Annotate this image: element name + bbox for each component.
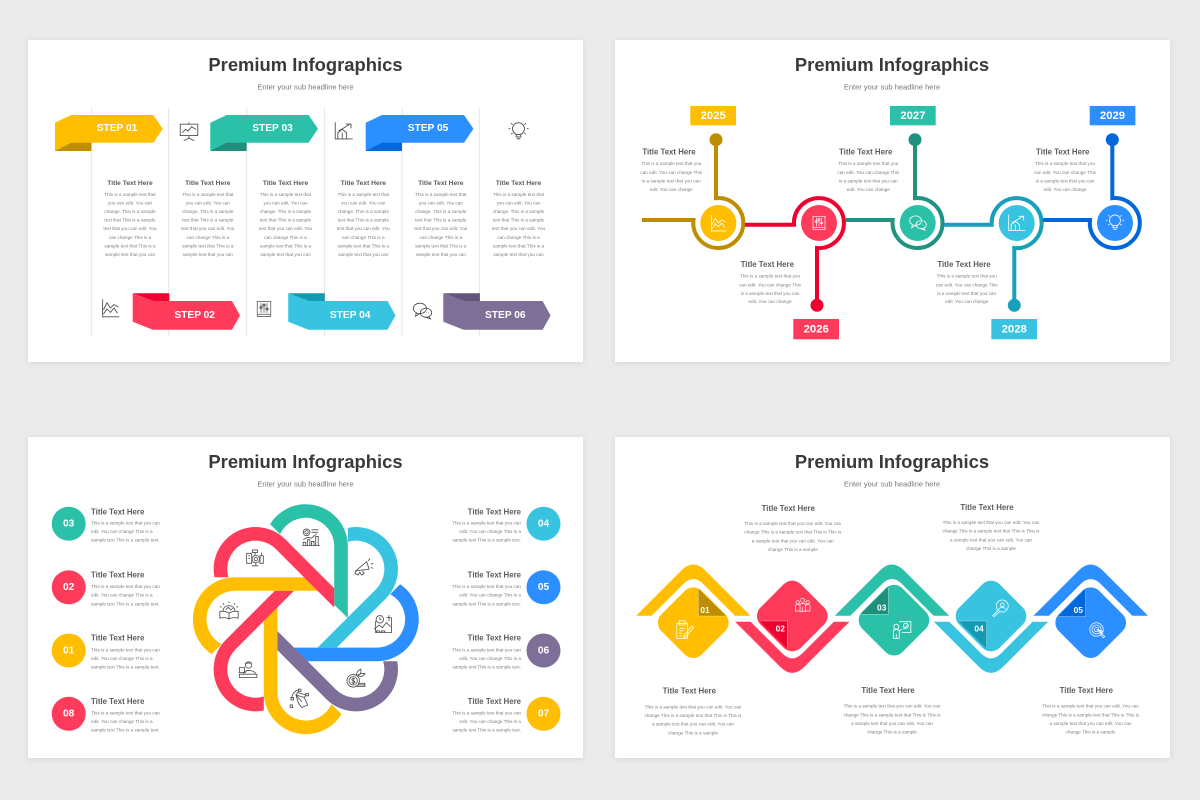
text column 6: you can edit. You can (496, 201, 541, 206)
text column 3: Title Text Here (263, 180, 309, 187)
text column 1: can change This is a (109, 235, 152, 240)
icon: light bulb (508, 123, 529, 139)
text block 2029: edit. You can change (1043, 187, 1087, 192)
list item 08: sample text This is a sample text. (91, 728, 160, 733)
text column 5: change. This is a sample (415, 209, 467, 214)
icon: megaphone (355, 558, 373, 575)
text column 1: Title Text Here (107, 180, 153, 187)
timeline node 2028: 2028 (1002, 323, 1027, 335)
icon: money plant (347, 669, 365, 687)
text block bottom center: a sample text that you can edit. You can (851, 721, 933, 726)
text block bottom left (645, 686, 742, 735)
timeline node 2027: 2027 (900, 110, 925, 122)
text column 6: text that This is a sample (493, 218, 545, 222)
list item 05: Title Text Here (468, 570, 522, 579)
diamond 02: 02 (776, 623, 785, 633)
text block 2027: can edit. You can change This (837, 170, 900, 175)
text column 6: sample text that This is a (493, 243, 545, 248)
list item 05: sample text This is a sample text. (452, 601, 521, 606)
icon: team network (247, 550, 263, 566)
diamond 01: 01 (700, 605, 710, 615)
diamond 04 (934, 576, 1048, 673)
list item 08: Title Text Here (91, 697, 145, 706)
text block 2027: This is a sample text that you (838, 161, 899, 166)
text block 2026: can edit. You can change This (739, 282, 802, 287)
text block bottom center: change This is a sample text that This is This is (844, 712, 941, 717)
text block 2028: edit. You can change (945, 299, 989, 304)
text block bottom center: change This is a sample (867, 730, 917, 735)
list item 08: edit. You can change This is a (91, 719, 153, 724)
text block top right: a sample text that you can edit. You can (950, 537, 1032, 542)
list item 07: 07 (538, 709, 549, 720)
icon: sliders (257, 302, 271, 316)
text column 1: text that you can edit. You (103, 226, 157, 231)
loop: yellow left (193, 577, 318, 654)
text block 2027: edit. You can change (847, 187, 890, 192)
text block bottom center: This is a sample text that you can edit. You can (844, 704, 941, 709)
text column 3: change. This is a sample (260, 209, 312, 214)
text block 2029: is a sample text that you can (1036, 178, 1095, 184)
text column 5 (414, 180, 468, 257)
text block 2025: can edit. You can change This (640, 170, 703, 175)
text column 4: sample text that you can (338, 252, 389, 257)
text column 2: Title Text Here (185, 180, 231, 187)
list item 08: This is a sample text that you can (91, 710, 160, 715)
text block bottom right: This is a sample text that you can edit. You can (1042, 704, 1139, 709)
text block top left: This is a sample text that you can edit. You can (744, 521, 842, 526)
text column 6: Title Text Here (496, 180, 542, 187)
text column 6: can change This is a (497, 235, 540, 240)
subheading: Enter your sub headline here (257, 82, 354, 92)
icon: pen tool (290, 689, 308, 707)
icon: open book (220, 602, 238, 619)
text block top left (744, 504, 842, 552)
text block 2026: This is a sample text that you (740, 274, 800, 279)
panel: diamond process (615, 437, 1170, 758)
list item 04: Title Text Here (468, 507, 522, 516)
timeline node 2025 (642, 106, 743, 248)
text block bottom left: This is a sample text that you can edit. You can (645, 704, 742, 709)
text block 2026: edit. You can change (748, 299, 792, 304)
text block 2029: This is a sample text that you (1035, 161, 1095, 166)
text block bottom right: change This is a sample text that This is This is (1042, 712, 1140, 717)
list item 07: Title Text Here (468, 697, 522, 706)
text column 6: text that you can edit. You (492, 226, 545, 231)
ribbon: step 01 (55, 115, 163, 151)
ribbon: step 04 (288, 293, 396, 330)
text block 2026 (739, 260, 802, 304)
loop: red lower (196, 581, 339, 724)
text block bottom center: Title Text Here (861, 686, 915, 695)
list item 07 (452, 697, 560, 733)
text column 2: change. This is a sample (182, 209, 234, 214)
text block 2025: is a sample text that you can (642, 178, 701, 184)
list item 06 (452, 634, 560, 670)
loop: yellow bottom (264, 607, 342, 734)
text column 4: sample text that This is a (338, 243, 389, 248)
ribbon: step 01: STEP 01 (97, 123, 138, 134)
text column 6: sample text that you can (493, 252, 544, 257)
ribbon: step 05 (366, 115, 473, 151)
text block bottom right: a sample text that you can edit. You can (1049, 721, 1132, 726)
text column 5: This is a sample text that (415, 192, 467, 197)
text column 5: you can edit. You can (419, 201, 463, 206)
list item 05: edit. You can change This is a (459, 593, 521, 598)
text block 2028: This is a sample text that you (937, 274, 997, 279)
icon: analytics (302, 529, 320, 546)
text block top right: change This is a sample (966, 546, 1016, 551)
text column 5: text that you can edit. You (414, 226, 468, 231)
text column 6: change. This is a sample (493, 209, 545, 214)
text column 5: text that This is a sample (415, 218, 467, 222)
text column 1: sample text that you can (105, 252, 156, 257)
list item 04: This is a sample text that you can (452, 520, 521, 525)
ribbon: step 03: STEP 03 (252, 123, 293, 134)
text column 1: text that This is a sample (104, 218, 156, 222)
text column 1 (103, 180, 157, 257)
text block top right: change This is a sample text that This is This is (943, 529, 1040, 534)
text block bottom left: Title Text Here (663, 686, 717, 695)
text column 3: text that This is a sample (260, 218, 312, 222)
text block 2025: This is a sample text that you (641, 161, 702, 166)
list item 02 (52, 570, 160, 606)
text block top left: change This is a sample text that This is This is (744, 530, 842, 535)
timeline node 2029: 2029 (1100, 110, 1125, 122)
text block bottom right: Title Text Here (1060, 686, 1114, 695)
list item 07: This is a sample text that you can (452, 710, 521, 715)
list item 07: sample text This is a sample text. (452, 728, 521, 733)
list item 04: edit. You can change This is a (459, 529, 521, 534)
text column 2: can change This is a (187, 235, 229, 240)
list item 01 (52, 634, 160, 670)
text block top left: a sample text that you can edit. You can (752, 538, 834, 543)
subheading: Enter your sub headline here (844, 82, 940, 92)
list item 01: edit. You can change This is a (91, 656, 153, 661)
ribbon: step 05: STEP 05 (408, 123, 449, 134)
text block 2026: Title Text Here (741, 260, 795, 269)
text column 3: sample text that you can (260, 252, 311, 257)
text column 4 (337, 180, 390, 257)
loop: red upper (201, 510, 344, 652)
ribbon: step 04: STEP 04 (330, 310, 371, 321)
text block 2028: can edit. You can change This (936, 282, 998, 287)
text column 4: text that This is a sample (338, 218, 389, 222)
text column 3 (259, 180, 312, 257)
text block bottom right (1042, 686, 1140, 735)
diamond 03 (835, 564, 949, 661)
text block 2025 (640, 148, 703, 192)
list item 02: This is a sample text that you can (91, 584, 160, 589)
text block top left: change This is a sample (768, 547, 818, 552)
text column 1: sample text that This is a (104, 243, 156, 248)
list item 03: Title Text Here (91, 507, 145, 516)
ribbon: step 02: STEP 02 (174, 310, 215, 321)
diamond 04: 04 (974, 623, 984, 633)
text block 2028: is a sample text that you can (937, 291, 997, 296)
text block bottom left: change This is a sample text that This is This is (645, 713, 742, 718)
text column 5: can change This is a (420, 235, 462, 240)
ribbon: step 06 (443, 293, 551, 330)
text column 6: This is a sample text that (493, 192, 545, 197)
list item 05 (452, 570, 560, 606)
list item 03: sample text This is a sample text. (91, 538, 160, 543)
subheading: Enter your sub headline here (844, 480, 940, 488)
text column 4: can change This is a (342, 235, 385, 240)
list item 05: 05 (538, 582, 549, 593)
text column 3: text that you can edit. You (259, 226, 312, 231)
diamond 03: 03 (877, 603, 887, 613)
text column 2: text that This is a sample (182, 218, 234, 222)
list item 07: edit. You can change This is a (459, 719, 521, 724)
list item 03: edit. You can change This is a (91, 529, 153, 534)
text block top right: This is a sample text that you can edit. You can (943, 520, 1040, 525)
list item 01: Title Text Here (91, 634, 145, 643)
list item 06: 06 (538, 645, 549, 656)
ribbon: step 06: STEP 06 (485, 310, 526, 321)
text block top right (943, 503, 1040, 551)
list item 01: 01 (63, 645, 75, 656)
text column 1: you can edit. You can (108, 201, 152, 206)
flower loops (193, 504, 419, 734)
diamond 05 (1034, 564, 1148, 663)
text column 4: This is a sample text that (338, 192, 390, 197)
text block 2025: edit. You can change (650, 187, 693, 192)
timeline node 2025: 2025 (701, 110, 726, 122)
icon: person at desk (239, 662, 257, 678)
timeline node 2029 (1043, 106, 1140, 248)
diamond 05: 05 (1074, 605, 1083, 615)
text block 2026: is a sample text that you can (741, 291, 800, 296)
ribbon: step 03 (210, 115, 318, 151)
icon: clock chart (374, 615, 391, 633)
list item 06: edit. You can change This is a (459, 656, 521, 661)
heading: Premium Infographics (208, 451, 403, 472)
text column 2: sample text that you can (183, 252, 233, 257)
list item 04: sample text This is a sample text. (452, 538, 521, 543)
timeline node 2026 (745, 198, 844, 339)
diamond 02 (735, 576, 850, 673)
icon: chat bubbles (413, 303, 432, 319)
text column 1: This is a sample text that (104, 192, 156, 197)
heading: Premium Infographics (208, 54, 403, 75)
text block 2028: Title Text Here (937, 260, 991, 269)
text column 2 (181, 180, 235, 257)
text column 1: change. This is a sample (104, 209, 156, 214)
text block bottom left: a sample text that you can edit. You can (652, 722, 734, 727)
timeline node 2026: 2026 (804, 323, 829, 335)
panel: year timeline (615, 40, 1170, 362)
text column 2: This is a sample text that (182, 192, 234, 197)
text block 2028 (936, 260, 998, 304)
heading: Premium Infographics (795, 451, 989, 472)
list item 04: 04 (538, 518, 549, 530)
text column 4: you can edit. You can (341, 201, 386, 206)
text column 4: text that you can edit. You (337, 226, 390, 231)
text column 2: sample text that This is a (182, 243, 234, 248)
list item 02: sample text This is a sample text. (91, 601, 160, 606)
text block 2029: can edit. You can change This (1034, 170, 1097, 175)
list item 05: This is a sample text that you can (452, 584, 521, 589)
list item 04 (452, 507, 560, 543)
diamond 01 (636, 564, 750, 663)
heading: Premium Infographics (795, 54, 989, 75)
text column 3: can change This is a (264, 235, 307, 240)
list item 01: sample text This is a sample text. (91, 665, 160, 670)
text column 3: you can edit. You can (263, 201, 308, 206)
list item 08: 08 (63, 709, 75, 720)
text block bottom right: change This is a sample (1066, 730, 1116, 735)
text block 2027: is a sample text that you can (839, 178, 898, 184)
text block 2027 (837, 148, 900, 192)
panel: six step ribbons (28, 40, 583, 362)
list item 06: Title Text Here (468, 634, 522, 643)
timeline node 2028 (944, 198, 1042, 339)
list item 02: Title Text Here (91, 570, 145, 579)
icon: line chart (103, 299, 119, 317)
text block top right: Title Text Here (960, 503, 1014, 512)
text column 3: sample text that This is a (260, 243, 312, 248)
list item 02: 02 (63, 582, 75, 593)
text column 6 (492, 180, 545, 257)
text column 5: Title Text Here (418, 180, 464, 187)
list item 02: edit. You can change This is a (91, 593, 153, 598)
loop: teal (270, 504, 348, 618)
text column 5: sample text that you can (416, 252, 466, 257)
list item 03 (52, 507, 160, 543)
text block bottom center (844, 686, 941, 735)
timeline node 2027 (846, 106, 943, 248)
text column 4: change. This is a sample (338, 209, 389, 214)
loop: blue (294, 584, 419, 661)
panel: interlaced flower (28, 437, 583, 758)
text block 2029: Title Text Here (1036, 148, 1090, 156)
text column 2: text that you can edit. You (181, 226, 235, 231)
text block 2027: Title Text Here (839, 148, 893, 156)
list item 08 (52, 697, 160, 733)
text block 2029 (1034, 148, 1097, 192)
icon: growth chart (335, 122, 353, 139)
text column 5: sample text that This is a (415, 243, 467, 248)
ribbon: step 02 (133, 293, 240, 330)
loop: cyan (273, 515, 415, 657)
text column 2: you can edit. You can (186, 201, 230, 206)
list item 01: This is a sample text that you can (91, 647, 160, 652)
text column 4: Title Text Here (341, 180, 386, 187)
list item 03: 03 (63, 518, 75, 530)
list item 06: sample text This is a sample text. (452, 665, 521, 670)
icon: presentation (180, 122, 198, 141)
text block bottom left: change This is a sample (668, 730, 718, 735)
text block 2025: Title Text Here (642, 148, 696, 156)
text column 3: This is a sample text that (260, 192, 312, 197)
list item 06: This is a sample text that you can (452, 647, 521, 652)
loop: purple (268, 586, 410, 729)
list item 03: This is a sample text that you can (91, 520, 160, 525)
text block top left: Title Text Here (762, 504, 816, 513)
subheading: Enter your sub headline here (257, 480, 354, 488)
